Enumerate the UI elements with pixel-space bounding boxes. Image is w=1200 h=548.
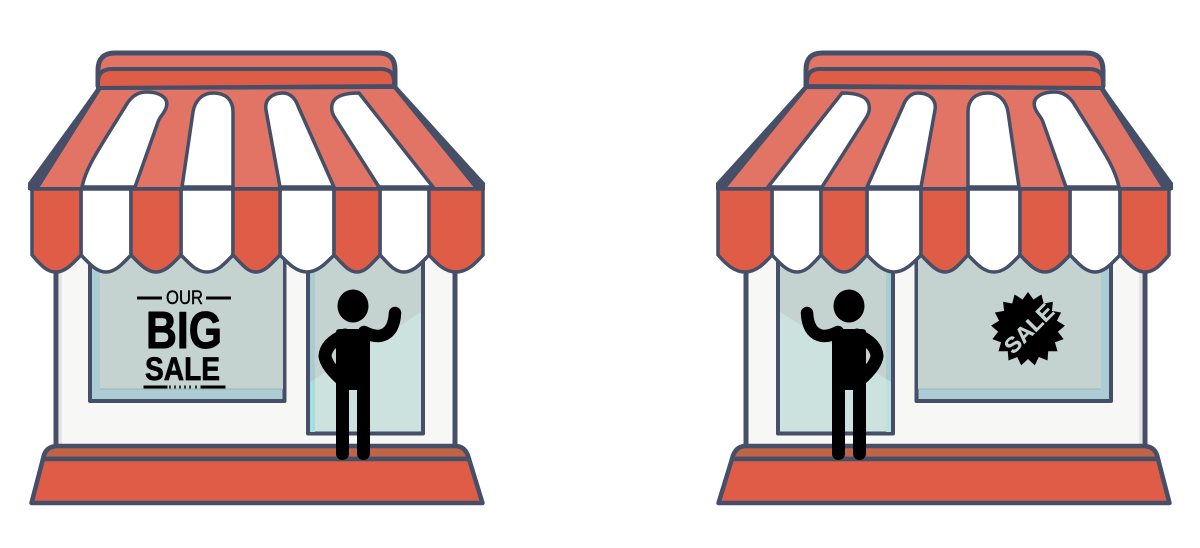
awning roof bbox=[716, 53, 1173, 190]
person waving bbox=[325, 290, 395, 454]
display window bbox=[90, 255, 284, 401]
roof thick side edges bbox=[716, 86, 1173, 190]
wall bbox=[746, 255, 1145, 450]
roof cap upper bbox=[806, 53, 1103, 86]
roof slope bbox=[718, 87, 1170, 189]
sale poster text bbox=[137, 287, 231, 388]
person waving bbox=[807, 290, 877, 454]
wall bbox=[56, 255, 455, 450]
awning valance bbox=[718, 189, 1169, 272]
shop: right storefront bbox=[716, 53, 1173, 503]
white roof stripes bbox=[82, 92, 433, 187]
door glass bbox=[778, 255, 893, 434]
shop: left storefront bbox=[28, 53, 485, 503]
step top bbox=[43, 446, 469, 459]
door glass bbox=[308, 255, 423, 434]
awning valance bbox=[32, 189, 483, 272]
pavement base bbox=[32, 459, 482, 503]
sale starburst badge bbox=[991, 292, 1065, 365]
white roof stripes bbox=[768, 92, 1119, 187]
roof cap lower bbox=[807, 69, 1103, 88]
awning roof bbox=[28, 53, 485, 190]
sale poster text: BIG bbox=[146, 302, 222, 360]
roof cap upper bbox=[98, 53, 395, 86]
step top bbox=[732, 446, 1158, 459]
display window bbox=[916, 255, 1111, 401]
roof slope bbox=[31, 87, 483, 189]
sale starburst badge: SALE bbox=[999, 299, 1059, 359]
sale poster text: SALE bbox=[145, 351, 220, 387]
sale poster text: OUR bbox=[166, 287, 203, 309]
roof cap lower bbox=[98, 69, 394, 88]
pavement base bbox=[718, 459, 1170, 503]
roof thick side edges bbox=[28, 86, 485, 190]
